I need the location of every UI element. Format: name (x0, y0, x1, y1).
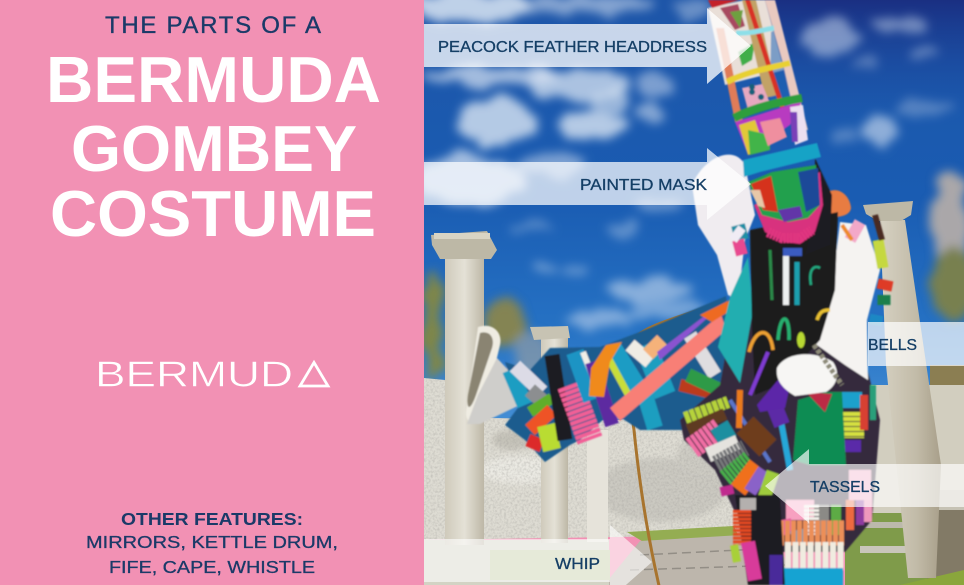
text block: other features: FIFE, CAPE, WHISTLE (109, 557, 315, 577)
clouds (410, 0, 955, 349)
text block: other features (86, 509, 338, 577)
white left sleeve (692, 155, 755, 300)
white glove (777, 354, 837, 396)
panel: pink title panel (0, 0, 424, 585)
tassel trim by arms (733, 215, 886, 325)
dancer figure (466, 0, 886, 585)
title: Bermuda Gombey Costume (46, 43, 381, 250)
callout: painted mask: PAINTED MASK (580, 177, 708, 194)
orange shoulder piece (828, 190, 851, 217)
cape (718, 257, 753, 383)
callout: whip (424, 525, 652, 585)
title: Bermuda Gombey Costume: GOMBEY (71, 112, 357, 185)
painted mask with beard (748, 158, 832, 255)
title: Bermuda Gombey Costume: BERMUDA (46, 43, 381, 116)
logo: Bermuda wordmark: BERMUDA (95, 354, 324, 394)
skirt with tassels (680, 300, 880, 585)
title: Bermuda Gombey Costume: COSTUME (50, 177, 376, 250)
text block: other features: MIRRORS, KETTLE DRUM, (86, 532, 338, 552)
bells on bracelet (814, 345, 842, 385)
callout: tassels (765, 449, 964, 523)
purple sash (757, 380, 790, 412)
whip (628, 300, 726, 585)
photo: Gombey dancer among stone columns (410, 0, 964, 585)
white right sleeve and chest (810, 222, 880, 380)
stone wall and ground (424, 378, 964, 585)
headdress (708, 0, 821, 177)
stone columns (431, 201, 941, 578)
black braids and chest (749, 212, 838, 395)
sky (424, 0, 964, 440)
raised leg with sneaker and tassels (466, 296, 745, 462)
trees and bushes (424, 164, 964, 385)
callout: bells (868, 322, 964, 366)
callout: peacock feather headdress: PEACOCK FEATHER HEADDRESS (438, 39, 707, 56)
text block: other features: OTHER FEATURES: (121, 509, 303, 529)
heading: the parts of a: THE PARTS OF A (105, 12, 321, 39)
callout: bells: BELLS (868, 337, 917, 354)
callout: painted mask (424, 148, 751, 220)
callout: whip: WHIP (555, 556, 600, 573)
callout: peacock feather headdress (424, 8, 751, 84)
callout: tassels: TASSELS (810, 479, 880, 496)
